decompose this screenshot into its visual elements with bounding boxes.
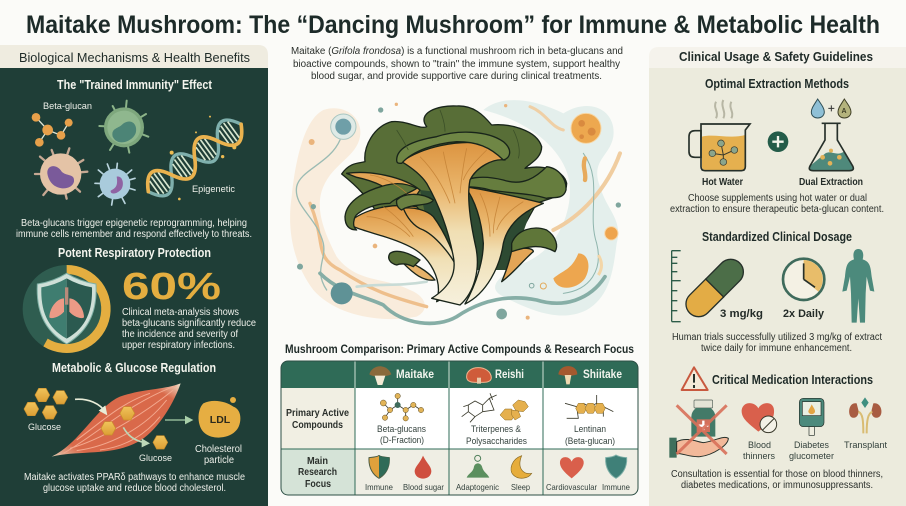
heading: extraction methods: Optimal Extraction Methods bbox=[705, 77, 849, 91]
icon: shield with lungs and 60 percent ring bbox=[23, 265, 111, 353]
diagram: glucose uptake in muscle bbox=[24, 383, 240, 457]
text: choose supplements: extraction to ensure therapeutic beta-glucan content. bbox=[670, 204, 884, 215]
label: beta-glucan: Beta-glucan bbox=[43, 101, 92, 112]
compound names: Triterpenes & bbox=[471, 424, 522, 435]
labels: extraction types bbox=[702, 177, 863, 188]
labels: interaction categories: Blood bbox=[748, 440, 771, 451]
icon: DNA helix bbox=[140, 113, 249, 203]
labels: glucose and cholesterol: particle bbox=[204, 455, 234, 466]
text: choose supplements: Choose supplements using hot water or dual bbox=[688, 193, 867, 204]
label: LDL: LDL bbox=[210, 414, 231, 426]
table row labels: Primary Active bbox=[286, 408, 349, 419]
table column headers bbox=[396, 367, 622, 381]
label: A in drop: A bbox=[841, 108, 847, 115]
table column headers: Shiitake bbox=[583, 367, 622, 381]
text: consultation bbox=[671, 469, 883, 491]
text: beta-glucans description: immune cells remember and respond effectively to threats. bbox=[16, 229, 252, 240]
text: clinical meta-analysis bbox=[122, 307, 256, 351]
table row labels: Focus bbox=[305, 479, 331, 490]
compound names bbox=[377, 424, 615, 447]
labels: glucose and cholesterol bbox=[28, 422, 242, 466]
icons: beaker plus flask bbox=[689, 99, 853, 171]
table heading: Mushroom Comparison: Primary Active Compounds & Research Focus bbox=[285, 342, 634, 356]
text: beta-glucans description: Beta-glucans trigger epigenetic reprogramming, helping bbox=[21, 218, 247, 229]
text: human trials: Human trials successfully utilized 3 mg/kg of extract bbox=[672, 332, 882, 343]
compound molecules bbox=[380, 393, 613, 422]
labels: interaction categories: glucometer bbox=[789, 451, 834, 462]
research focus labels bbox=[365, 482, 630, 492]
research focus labels: Immune bbox=[602, 482, 630, 492]
text: clinical meta-analysis: upper respiratory infections. bbox=[122, 340, 235, 351]
text: clinical meta-analysis: the incidence and severity of bbox=[122, 329, 238, 340]
comparison table bbox=[281, 361, 638, 495]
labels: dose and frequency: 3 mg/kg bbox=[720, 308, 763, 320]
intro text: bioactive compounds, shown to "train" the immune system, support healthy bbox=[293, 59, 620, 70]
labels: dose and frequency: 2x Daily bbox=[783, 308, 825, 320]
heading: respiratory protection: Potent Respiratory Protection bbox=[58, 245, 211, 260]
research focus labels: Sleep bbox=[511, 482, 530, 492]
intro text: blood sugar, and provide supportive care during clinical treatments. bbox=[311, 71, 602, 82]
labels: glucose and cholesterol: Glucose bbox=[139, 453, 172, 464]
text: consultation: diabetes medications, or immunosuppressants. bbox=[681, 480, 873, 491]
table row labels: Compounds bbox=[292, 420, 343, 431]
table column headers: Maitake bbox=[396, 367, 434, 381]
icons: ruler, capsule, clock, body bbox=[672, 249, 874, 323]
heading: trained immunity: The "Trained Immunity" Effect bbox=[57, 77, 213, 92]
text: choose supplements bbox=[670, 193, 884, 215]
text: clinical meta-analysis: beta-glucans significantly reduce bbox=[122, 318, 256, 329]
table header icons bbox=[369, 366, 577, 385]
label: epigenetic: Epigenetic bbox=[192, 184, 235, 195]
research focus labels: Blood sugar bbox=[403, 482, 444, 492]
intro text: Maitake (Grifola frondosa) is a functional mushroom rich in beta-glucans and bbox=[291, 46, 623, 57]
heading: clinical dosage: Standardized Clinical Dosage bbox=[702, 230, 852, 244]
labels: dose and frequency bbox=[720, 308, 825, 320]
table row labels: Research bbox=[298, 467, 337, 478]
compound names: Polysaccharides bbox=[466, 436, 527, 447]
intro text bbox=[291, 46, 623, 82]
text: PPAR pathways description: Maitake activates PPARδ pathways to enhance muscle bbox=[24, 472, 245, 483]
text: human trials: twice daily for immune enhancement. bbox=[701, 343, 852, 354]
icon: warning triangle bbox=[682, 367, 708, 390]
icons: immune cells and molecule bbox=[32, 101, 148, 205]
research focus labels: Immune bbox=[365, 482, 393, 492]
panel heading: clinical usage: Clinical Usage & Safety Guidelines bbox=[679, 50, 873, 64]
research focus icons bbox=[369, 455, 627, 479]
compound names: (Beta-glucan) bbox=[565, 436, 615, 447]
compound names: Lentinan bbox=[574, 424, 606, 435]
labels: interaction categories: Transplant bbox=[844, 440, 887, 451]
panel: biological mechanisms bbox=[0, 45, 268, 506]
labels: interaction categories: Diabetes bbox=[794, 440, 829, 451]
stat: 60 percent: 60% bbox=[122, 266, 221, 308]
table column headers: Reishi bbox=[495, 367, 524, 381]
compound names: Beta-glucans bbox=[377, 424, 426, 435]
research focus labels: Adaptogenic bbox=[456, 482, 500, 492]
research focus labels: Cardiovascular bbox=[546, 482, 597, 492]
text: beta-glucans description bbox=[16, 218, 252, 240]
panel: clinical usage and safety bbox=[649, 47, 906, 506]
text: PPAR pathways description bbox=[24, 472, 245, 494]
panel heading: biological mechanisms: Biological Mechanisms & Health Benefits bbox=[19, 50, 250, 65]
labels: extraction types: Dual Extraction bbox=[799, 177, 863, 188]
table row labels bbox=[286, 408, 349, 490]
compound names: (D-Fraction) bbox=[380, 435, 424, 446]
labels: interaction categories bbox=[743, 440, 887, 462]
labels: glucose and cholesterol: Glucose bbox=[28, 422, 61, 433]
icons: medication interactions bbox=[669, 397, 881, 458]
illustration: maitake mushroom bbox=[290, 100, 621, 323]
text: PPAR pathways description: glucose uptake and reduce blood cholesterol. bbox=[43, 483, 226, 494]
text: human trials bbox=[672, 332, 882, 354]
labels: interaction categories: thinners bbox=[743, 451, 775, 462]
heading: medication interactions: Critical Medication Interactions bbox=[712, 373, 873, 387]
table row labels: Main bbox=[307, 456, 328, 467]
text: clinical meta-analysis: Clinical meta-analysis shows bbox=[122, 307, 239, 318]
labels: extraction types: Hot Water bbox=[702, 177, 743, 188]
labels: glucose and cholesterol: Cholesterol bbox=[195, 444, 242, 455]
text: consultation: Consultation is essential for those on blood thinners, bbox=[671, 469, 883, 480]
heading: metabolic regulation: Metabolic & Glucose Regulation bbox=[52, 360, 216, 375]
